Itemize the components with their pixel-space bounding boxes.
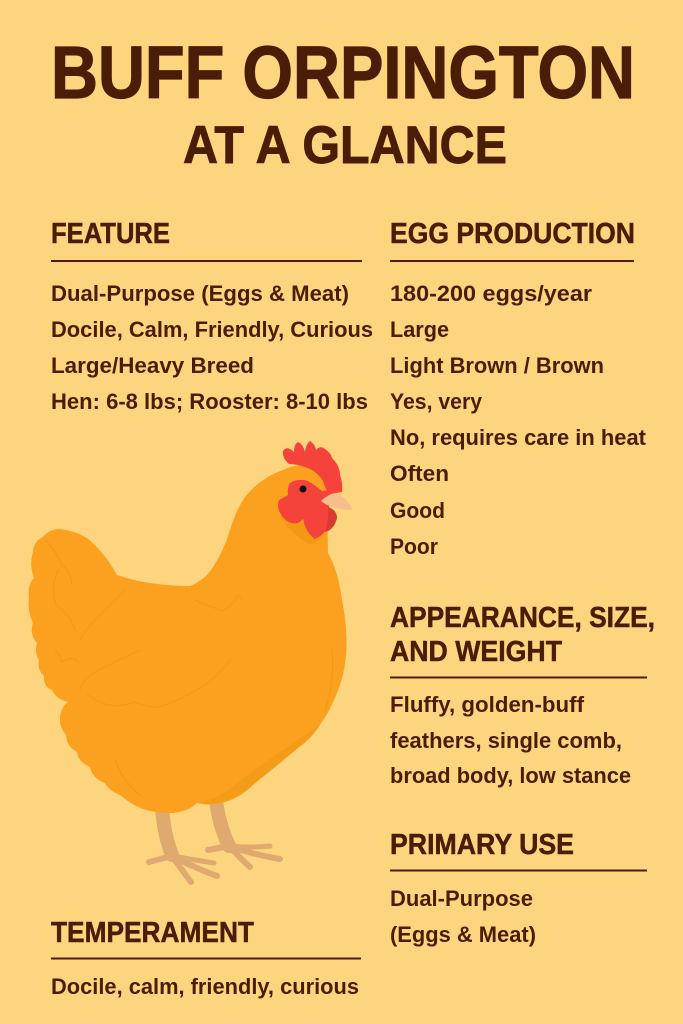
back leg and foot — [149, 808, 217, 882]
feature list: Dual-Purpose (Eggs & Meat) — [51, 281, 349, 306]
egg production list: Light Brown / Brown — [390, 353, 604, 378]
primary use text: (Eggs & Meat) — [390, 922, 536, 947]
beak — [321, 493, 353, 510]
primary use text: Dual-Purpose — [390, 886, 533, 911]
face and wattle — [278, 480, 332, 539]
egg production list: Poor — [390, 534, 438, 559]
wattle side shade — [325, 507, 337, 532]
heading: egg production: EGG PRODUCTION — [390, 218, 635, 250]
front leg and foot — [208, 800, 280, 867]
feature list: Large/Heavy Breed — [51, 353, 254, 378]
illustration: buff orpington hen — [28, 441, 353, 882]
feather details — [45, 540, 333, 795]
eye — [300, 486, 306, 492]
heading: appearance — [390, 602, 655, 668]
heading: appearance: APPEARANCE, SIZE, — [390, 602, 655, 634]
title — [51, 31, 635, 175]
feature list — [51, 281, 373, 414]
feature list: Docile, Calm, Friendly, Curious — [51, 317, 373, 342]
egg production list: Yes, very — [390, 389, 482, 414]
egg production list: Good — [390, 498, 445, 523]
egg production list: No, requires care in heat — [390, 425, 646, 450]
heading: feature: FEATURE — [51, 218, 170, 250]
panel: egg production — [390, 218, 646, 559]
body — [28, 465, 346, 813]
neck shadow under face — [280, 515, 322, 545]
egg production list — [390, 281, 646, 559]
egg production list: 180-200 eggs/year — [390, 281, 592, 306]
egg production list: Large — [390, 317, 449, 342]
feature list: Hen: 6-8 lbs; Rooster: 8-10 lbs — [51, 389, 368, 414]
heading: temperament: TEMPERAMENT — [51, 917, 254, 949]
egg production list: Often — [390, 461, 449, 486]
temperament text: Docile, calm, friendly, curious — [51, 974, 359, 999]
appearance text: feathers, single comb, — [390, 728, 622, 753]
comb — [283, 441, 342, 494]
heading: appearance: AND WEIGHT — [390, 636, 562, 668]
panel: appearance, size, and weight — [390, 602, 655, 788]
panel: temperament — [51, 917, 361, 999]
title: AT A GLANCE — [183, 116, 507, 175]
panel: feature — [51, 218, 373, 414]
panel: primary use — [390, 829, 647, 947]
appearance text: broad body, low stance — [390, 763, 631, 788]
primary use text — [390, 886, 536, 947]
appearance text — [390, 692, 631, 788]
appearance text: Fluffy, golden-buff — [390, 692, 584, 717]
heading: primary use: PRIMARY USE — [390, 829, 574, 861]
belly shadow — [197, 725, 320, 804]
